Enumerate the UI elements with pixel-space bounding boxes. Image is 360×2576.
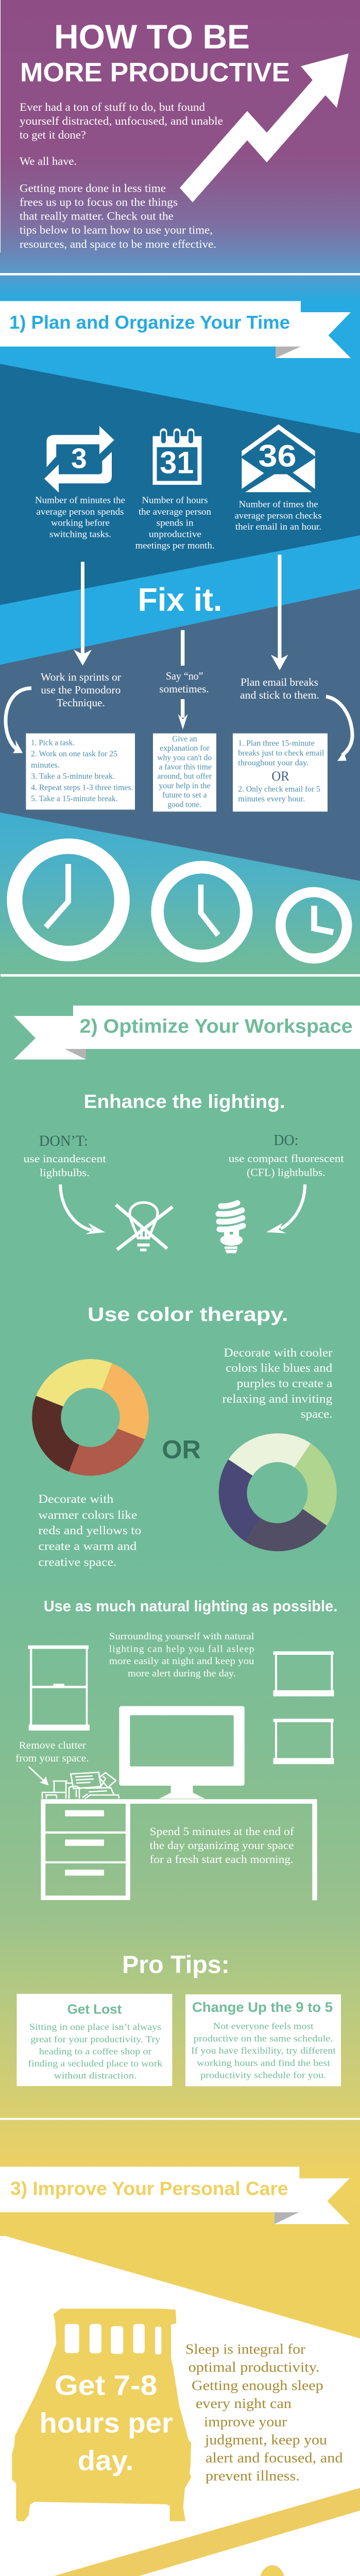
hero panel xyxy=(20,18,349,250)
intro text: Ever had a ton of stuff to do, but found xyxy=(20,100,205,113)
text: cool colors: space. xyxy=(301,1408,333,1420)
title: MORE PRODUCTIVE xyxy=(20,58,290,88)
icon: upper right window xyxy=(273,1651,334,1697)
section 1 ribbon heading xyxy=(0,301,351,358)
don't text: DON’T: xyxy=(39,1132,88,1149)
arrow: curved left xyxy=(6,688,31,753)
card: get lost xyxy=(16,1994,172,2086)
icon: lower right window xyxy=(273,1719,334,1764)
stat caption: email: their email in an hour. xyxy=(235,521,321,532)
arrow: to say no xyxy=(181,630,184,666)
icon: large clock xyxy=(14,846,122,954)
box: say no advice: future to set a xyxy=(162,791,207,800)
title xyxy=(20,18,290,88)
tip: email breaks: Plan email breaks xyxy=(241,676,318,688)
box: say no advice: Give an xyxy=(172,735,197,743)
text: sleep xyxy=(185,2341,343,2483)
intro text: We all have. xyxy=(20,155,77,167)
text: warm colors: Decorate with xyxy=(38,1493,114,1505)
tip: sprints: Work in sprints or xyxy=(41,671,121,683)
intro text: to get it done? xyxy=(20,128,86,141)
box: pomodoro steps xyxy=(26,734,135,810)
text: cool colors: Decorate with cooler xyxy=(224,1346,333,1359)
stat caption: hours: unproductive xyxy=(149,529,201,539)
text: natural lighting benefit: Surrounding yourself with natural xyxy=(109,1631,254,1642)
stat caption: email: average person checks xyxy=(235,510,322,520)
do text: DO: xyxy=(273,1132,298,1149)
text: cool colors: relaxing and inviting xyxy=(222,1392,333,1405)
card: get lost: without distraction. xyxy=(54,2070,136,2080)
box: say no advice: around, but offer xyxy=(157,772,212,781)
box: pomodoro steps: 2. Work on one task for 25 xyxy=(31,750,117,758)
tip: say no: Say “no” xyxy=(166,670,203,682)
icon: medium clock xyxy=(158,867,246,956)
stat caption: minutes xyxy=(35,495,125,539)
box: email plan: minutes every hour. xyxy=(238,794,305,804)
icon: bed with sleep headline xyxy=(12,2309,191,2521)
text: natural lighting benefit: lighting can help you fall asleep xyxy=(109,1643,254,1654)
section 2 ribbon heading xyxy=(14,1006,360,1059)
icon: envelope with 36 xyxy=(242,425,315,492)
arrow: to clutter xyxy=(29,1767,48,1786)
card: get lost: great for your productivity. Try xyxy=(30,2034,160,2044)
tip: sprints xyxy=(41,671,121,709)
arrow: to cfl bulb xyxy=(266,1184,305,1233)
box: say no advice: why you can't do xyxy=(157,753,212,762)
do text: use compact fluorescent xyxy=(229,1152,344,1164)
text: spend 5 minutes xyxy=(150,1825,294,1866)
text: sleep: improve your xyxy=(204,2414,287,2429)
intro text: tips below to learn how to use your time, xyxy=(20,224,213,236)
text: remove clutter: Remove clutter xyxy=(19,1740,86,1751)
tip: say no: sometimes. xyxy=(159,683,209,695)
heading: natural lighting: Use as much natural lighting as possible. xyxy=(44,1598,337,1615)
tip: email breaks: and stick to them. xyxy=(240,689,319,701)
panel: dark blue statistics band xyxy=(0,364,360,605)
section 3 ribbon heading xyxy=(0,2167,350,2224)
icon: cfl bulb xyxy=(218,1203,243,1253)
do text xyxy=(229,1132,344,1178)
title: HOW TO BE xyxy=(54,18,250,56)
icon: calendar with 31 xyxy=(152,429,201,485)
text: sleep: alert and focused, and xyxy=(205,2450,343,2466)
box: email plan: breaks just to check email xyxy=(238,749,324,758)
text: natural lighting benefit: more alert during the day. xyxy=(128,1668,236,1679)
tip: sprints: Technique. xyxy=(57,697,105,709)
icon: calendar with 31: 31 xyxy=(160,445,194,480)
card: get lost: Get Lost xyxy=(67,2002,122,2017)
stat caption: email: Number of times the xyxy=(239,499,318,510)
text: warm colors: warmer colors like xyxy=(38,1509,137,1521)
card: get lost: heading to a coffee shop or xyxy=(39,2046,151,2056)
stat caption: minutes: average person spends xyxy=(36,506,124,517)
card: change up the 9 to 5: productivity schedule for you. xyxy=(200,2070,326,2080)
text: spend 5 minutes: Spend 5 minutes at the end of xyxy=(150,1825,294,1838)
panel: slate fix-it band xyxy=(0,589,360,881)
text: spend 5 minutes: the day organizing your space xyxy=(150,1839,294,1852)
stat caption: hours xyxy=(135,495,215,550)
don't text: lightbulbs. xyxy=(40,1166,90,1179)
box: say no advice: good tone. xyxy=(167,801,201,809)
arrow: to email breaks xyxy=(271,555,288,670)
text: cool colors: purples to create a xyxy=(237,1377,333,1390)
box: email plan: throughout your day. xyxy=(238,758,308,768)
icon: envelope with 36: 36 xyxy=(259,439,297,473)
stat caption: hours: the average person xyxy=(139,506,211,517)
text: natural lighting benefit xyxy=(109,1631,254,1679)
stat caption: minutes: switching tasks. xyxy=(49,529,111,539)
icon: bed with sleep headline: hours per xyxy=(40,2407,173,2439)
box: email plan xyxy=(233,734,328,811)
box: pomodoro steps: 5. Take a 15-minute break. xyxy=(31,794,118,803)
text: warm colors: creative space. xyxy=(38,1556,116,1568)
tip: email breaks xyxy=(240,676,319,701)
text: sleep: Getting enough sleep xyxy=(192,2378,323,2393)
text: sleep: prevent illness. xyxy=(205,2468,300,2483)
text: natural lighting benefit: more easily at night and keep you xyxy=(109,1656,254,1667)
box: say no advice: explanation for xyxy=(160,744,210,753)
text: cool colors xyxy=(222,1346,333,1420)
icon: desk xyxy=(41,1799,317,1900)
stat caption: email xyxy=(235,499,322,532)
card: get lost: finding a secluded place to work xyxy=(28,2058,162,2069)
icon: monitor xyxy=(119,1706,245,1799)
card: change up the 9 to 5: If you have flexibility, try different xyxy=(191,2045,336,2056)
text: remove clutter: from your space. xyxy=(15,1753,89,1764)
card: change up the 9 to 5: Not everyone feels most xyxy=(213,2021,314,2031)
don't text xyxy=(24,1132,106,1179)
heading: enhance the lighting: Enhance the lighting. xyxy=(84,1091,285,1112)
arrow: to incandescent bulb xyxy=(60,1184,105,1234)
card: get lost: Sitting in one place isn’t always xyxy=(29,2022,161,2032)
heading: pro tips: Pro Tips: xyxy=(122,1952,230,1978)
arrow: say no down xyxy=(178,699,188,730)
text: remove clutter xyxy=(15,1740,89,1764)
don't text: use incandescent xyxy=(24,1153,106,1165)
icon: desk clutter xyxy=(42,1772,119,1799)
or label: OR xyxy=(162,1435,201,1464)
icon: tall window xyxy=(28,1646,90,1731)
text: sleep: every night can xyxy=(196,2396,292,2411)
icon: bed with sleep headline: day. xyxy=(78,2445,134,2477)
personal care white background xyxy=(0,2236,360,2576)
arrow: curved right xyxy=(326,697,352,761)
box: pomodoro steps: 1. Pick a task. xyxy=(31,738,75,747)
stat caption: minutes: working before xyxy=(51,517,110,528)
arrow: to sprints xyxy=(74,562,92,666)
intro text xyxy=(20,100,223,250)
intro text: that really matter. Check out the xyxy=(20,210,174,223)
section 1 ribbon heading: 1) Plan and Organize Your Time xyxy=(9,312,290,333)
section 3 ribbon heading: 3) Improve Your Personal Care xyxy=(10,2178,288,2199)
chart: warm colors donut xyxy=(32,1359,149,1476)
icon: repeat arrows with 3 xyxy=(44,426,114,493)
stat caption: minutes: Number of minutes the xyxy=(35,495,125,505)
stat caption: hours: Number of hours xyxy=(142,495,208,505)
yellow diagonal stripe xyxy=(0,2488,360,2576)
text: sleep: optimal productivity. xyxy=(188,2360,320,2375)
text: warm colors: create a warm and xyxy=(38,1540,137,1553)
intro text: yourself distracted, unfocused, and unable xyxy=(20,114,223,127)
icon: crossed out incandescent bulb xyxy=(116,1202,173,1251)
do text: (CFL) lightbulbs. xyxy=(247,1166,325,1178)
box: email plan: OR xyxy=(271,769,289,784)
text: warm colors: reds and yellows to xyxy=(38,1524,141,1537)
icon: bed with sleep headline: Get 7-8 xyxy=(55,2369,157,2401)
box: say no advice: your help in the xyxy=(159,782,211,790)
icon: repeat arrows with 3: 3 xyxy=(71,443,87,474)
intro text: resources, and space to be more effective. xyxy=(20,238,216,250)
text: spend 5 minutes: for a fresh start each morning. xyxy=(150,1853,294,1866)
icon: rising zig-zag arrow xyxy=(180,54,349,202)
text: sleep: judgment, keep you xyxy=(204,2432,328,2447)
text: warm colors xyxy=(38,1493,141,1568)
tip: sprints: use the Pomodoro xyxy=(41,684,121,696)
text: cool colors: colors like blues and xyxy=(226,1362,333,1375)
box: email plan: 1. Plan three 15-minute xyxy=(238,739,315,748)
card: change up the 9 to 5: productive on the same schedule. xyxy=(194,2033,333,2043)
icon: small clock xyxy=(281,892,347,958)
chart: cool colors donut xyxy=(219,1433,337,1551)
section 2 ribbon heading: 2) Optimize Your Workspace xyxy=(80,1015,353,1037)
box: say no advice: a favor this time xyxy=(159,762,212,771)
stat caption: hours: meetings per month. xyxy=(135,540,215,550)
intro text: frees us up to focus on the things xyxy=(20,196,178,209)
intro text: Getting more done in less time xyxy=(20,181,166,195)
card: change up the 9 to 5 xyxy=(185,1994,341,2086)
tip: say no xyxy=(159,670,209,695)
icon: runner xyxy=(237,2565,340,2576)
box: email plan: 2. Only check email for 5 xyxy=(238,785,320,794)
box: say no advice xyxy=(153,734,216,811)
heading: Fix it: Fix it. xyxy=(138,582,222,618)
box: pomodoro steps: 4. Repeat steps 1-3 three times. xyxy=(31,783,133,792)
heading: use color therapy: Use color therapy. xyxy=(88,1304,288,1326)
stat caption: hours: spends in xyxy=(157,517,194,528)
text: sleep: Sleep is integral for xyxy=(185,2341,305,2357)
box: pomodoro steps: 3. Take a 5-minute break. xyxy=(31,772,115,781)
card: change up the 9 to 5: Change Up the 9 to 5 xyxy=(192,1999,333,2015)
card: change up the 9 to 5: working hours and find the best xyxy=(197,2058,330,2068)
box: pomodoro steps: minutes. xyxy=(31,761,60,770)
